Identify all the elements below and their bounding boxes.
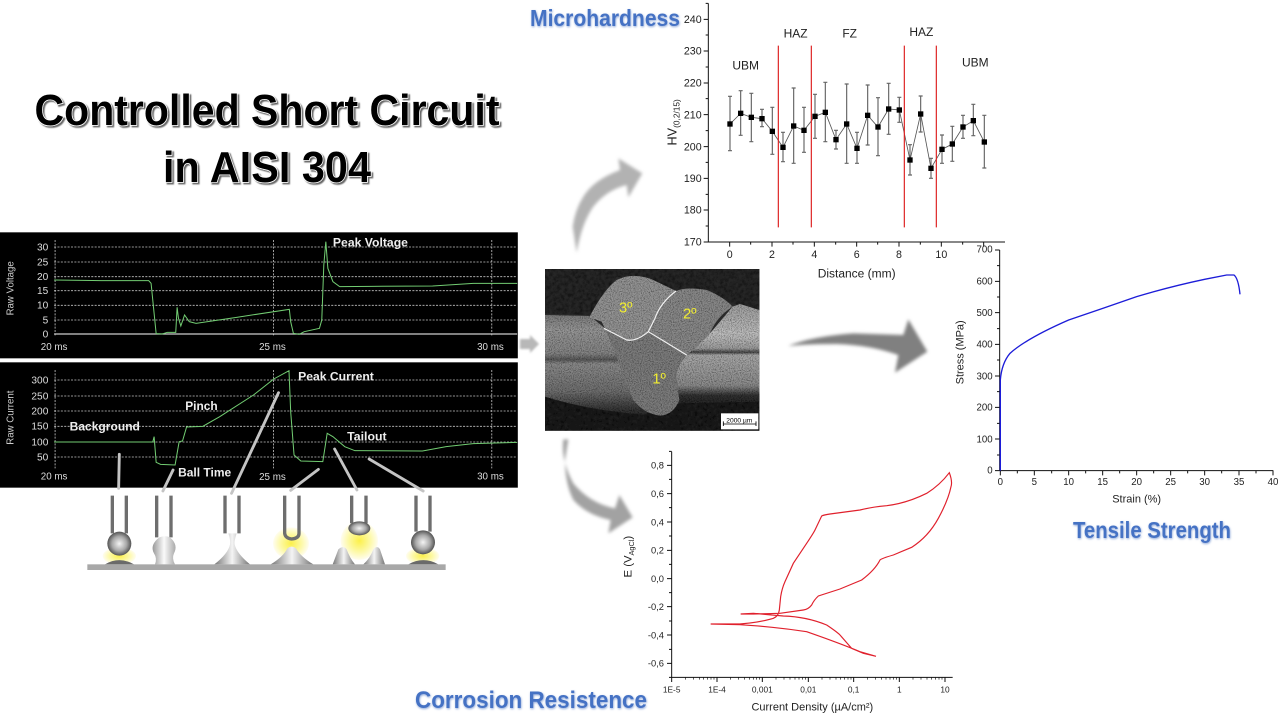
y tick labels: -0,4 — [648, 630, 664, 640]
current axis labels: 300 — [31, 375, 49, 386]
heading: tensile strength: Tensile Strength — [1073, 517, 1231, 543]
current axis labels: 250 — [31, 391, 49, 402]
voltage axis labels — [37, 242, 49, 340]
axes — [704, 3, 1005, 247]
polarization curve — [711, 473, 952, 656]
voltage trace — [54, 242, 517, 334]
y tick labels: 230 — [684, 46, 702, 58]
x tick labels: 40 — [1268, 477, 1278, 488]
labels: welding phases: Ball Time — [178, 467, 232, 480]
x tick labels — [727, 249, 947, 261]
zone labels — [732, 25, 989, 72]
x tick labels: 10 — [1063, 477, 1074, 488]
y tick labels: 240 — [684, 14, 702, 26]
heading: corrosion resistence: Corrosion Resistence — [415, 687, 647, 714]
x tick labels: 10 — [935, 249, 947, 261]
y axis title: Stress (MPa) — [955, 320, 967, 384]
zone labels: FZ — [842, 26, 857, 40]
arrow: micrograph to microhardness — [573, 158, 642, 253]
x tick labels: 5 — [1032, 477, 1037, 488]
x tick labels: 0 — [727, 249, 733, 261]
y tick labels: 220 — [684, 78, 702, 90]
y axis title: HV — [666, 128, 680, 145]
zone labels: HAZ — [784, 27, 808, 41]
weld pass 1 — [605, 328, 687, 416]
error bars — [728, 82, 986, 178]
weld pass 2 — [648, 289, 733, 355]
current axis labels — [31, 375, 49, 463]
base metal plates — [545, 315, 645, 415]
labels: welding phases — [70, 370, 387, 480]
x tick labels: 0,1 — [848, 684, 860, 694]
zone boundaries — [778, 46, 936, 227]
current axis labels: 150 — [31, 422, 49, 433]
current time labels: 30 ms — [477, 471, 504, 482]
voltage axis labels: 25 — [37, 257, 49, 268]
labels: welding phases: Background — [70, 420, 140, 433]
zone labels: UBM — [962, 56, 989, 70]
voltage axis title: Raw Voltage — [5, 261, 17, 315]
y tick labels: 400 — [977, 340, 993, 351]
y tick labels: -0,2 — [648, 602, 664, 612]
stress-strain curve — [1000, 275, 1240, 471]
x tick labels: 1E-5 — [663, 684, 681, 694]
title: Controlled Short Circuit — [34, 86, 500, 135]
voltage axis labels: 15 — [37, 286, 49, 297]
title — [34, 86, 500, 192]
x axis title: Distance (mm) — [818, 266, 896, 280]
labels: welding phases: Tailout — [347, 431, 387, 444]
x tick labels: 6 — [854, 249, 860, 261]
weld pass 3 — [589, 276, 676, 340]
arrow: micrograph to corrosion — [563, 439, 633, 533]
chart: polarization curve — [623, 451, 953, 714]
panel: waveform oscillograms — [0, 232, 518, 488]
x tick labels: 8 — [896, 249, 902, 261]
labels: welding phases: Peak Current — [298, 370, 374, 383]
x tick labels: 35 — [1234, 477, 1244, 488]
scale bar: 2000 µm — [726, 418, 753, 425]
panel: raw current — [0, 362, 518, 488]
panel: raw voltage — [0, 232, 518, 358]
voltage time labels: 20 ms — [41, 342, 68, 353]
y tick labels: 500 — [977, 308, 993, 319]
x tick labels: 0 — [998, 477, 1003, 488]
voltage axis labels: 20 — [37, 272, 49, 283]
x axis title: Strain (%) — [1112, 494, 1161, 506]
y tick labels: 170 — [684, 237, 702, 249]
voltage axis labels: 10 — [37, 301, 49, 312]
data line — [730, 109, 984, 168]
axes — [667, 451, 953, 682]
y tick labels: 190 — [684, 173, 702, 185]
x tick labels: 0,01 — [800, 684, 817, 694]
current axis labels: 200 — [31, 406, 49, 417]
y axis title: E (V — [623, 555, 635, 578]
chart: tensile stress-strain — [955, 245, 1278, 506]
y tick labels: 200 — [977, 403, 993, 414]
voltage axis labels: 5 — [43, 315, 49, 326]
heading: microhardness: Microhardness — [530, 5, 680, 31]
y tick labels: 100 — [977, 434, 993, 445]
label: peak voltage: Peak Voltage — [333, 237, 408, 250]
current axis labels: 50 — [37, 452, 49, 463]
current time labels: 20 ms — [41, 471, 68, 482]
x tick labels: 1E-4 — [708, 684, 726, 694]
axes — [995, 250, 1273, 475]
x tick labels: 20 — [1131, 477, 1142, 488]
voltage axis labels: 30 — [37, 242, 49, 253]
stage 3: pinch — [214, 496, 250, 564]
y axis title: ) — [623, 536, 635, 540]
current time labels: 25 ms — [259, 472, 286, 483]
y tick labels: 0,8 — [651, 461, 664, 471]
y tick labels: 200 — [684, 141, 702, 153]
voltage time labels — [41, 342, 504, 353]
y tick labels: -0,6 — [648, 659, 664, 669]
y tick labels — [684, 14, 702, 249]
labels: welding phases: Pinch — [185, 400, 218, 413]
y tick labels: 300 — [977, 371, 993, 382]
y tick labels — [977, 245, 993, 476]
pass labels: 2º — [683, 306, 697, 322]
voltage axis labels: 0 — [43, 329, 49, 340]
stage 2: ball time — [153, 496, 176, 564]
workpiece base plate — [87, 564, 446, 570]
x tick labels: 4 — [811, 249, 817, 261]
y tick labels: 210 — [684, 109, 702, 121]
pass labels: 3º — [619, 301, 633, 317]
chart: microhardness profile — [666, 3, 1005, 280]
y tick labels: 600 — [977, 277, 993, 288]
y tick labels: 0 — [987, 465, 993, 476]
zone labels: HAZ — [909, 25, 933, 39]
stage 1: background — [103, 496, 136, 565]
x tick labels: 0,001 — [752, 684, 773, 694]
connector lines: waveform to droplet stages — [119, 393, 423, 493]
title: in AISI 304 — [163, 143, 371, 192]
x tick labels — [663, 684, 950, 694]
x tick labels: 30 — [1199, 477, 1210, 488]
current trace — [54, 371, 517, 465]
y axis title: (0,2/15) — [671, 99, 681, 128]
diagram: droplet transfer stages — [87, 496, 446, 570]
panel: weld cross-section micrograph — [545, 269, 759, 431]
current axis labels: 100 — [31, 437, 49, 448]
voltage time labels: 25 ms — [259, 342, 286, 353]
current time labels — [41, 471, 504, 483]
x tick labels: 10 — [940, 684, 950, 694]
x tick labels: 2 — [769, 249, 775, 261]
arrow: waveform to micrograph — [520, 335, 539, 353]
x axis title: Current Density (µA/cm²) — [751, 702, 873, 714]
x tick labels: 1 — [897, 684, 902, 694]
dark mount texture — [545, 269, 759, 315]
voltage time labels: 30 ms — [477, 342, 504, 353]
data markers — [727, 106, 987, 171]
y tick labels: 0,4 — [651, 517, 664, 527]
weld pass boundaries — [604, 291, 687, 355]
arrow: micrograph to tensile strength — [788, 319, 927, 373]
pass labels: 1º — [652, 371, 666, 387]
zone labels: UBM — [732, 58, 759, 72]
y tick labels: 700 — [977, 245, 993, 256]
y tick labels: 0,0 — [651, 574, 664, 584]
x tick labels: 15 — [1097, 477, 1108, 488]
y tick labels: 180 — [684, 205, 702, 217]
y tick labels — [648, 461, 664, 669]
y tick labels: 0,6 — [651, 489, 664, 499]
pass labels — [619, 301, 697, 387]
stage 6: background return — [406, 496, 439, 565]
x tick labels: 25 — [1165, 477, 1176, 488]
y tick labels: 0,2 — [651, 546, 664, 556]
x tick labels — [998, 477, 1278, 488]
stage 5: tailout — [333, 496, 385, 564]
scale bar — [721, 413, 758, 429]
current axis title: Raw Current — [5, 390, 17, 445]
stage 4: peak current — [271, 496, 313, 564]
y axis title: AgCl — [627, 539, 636, 555]
